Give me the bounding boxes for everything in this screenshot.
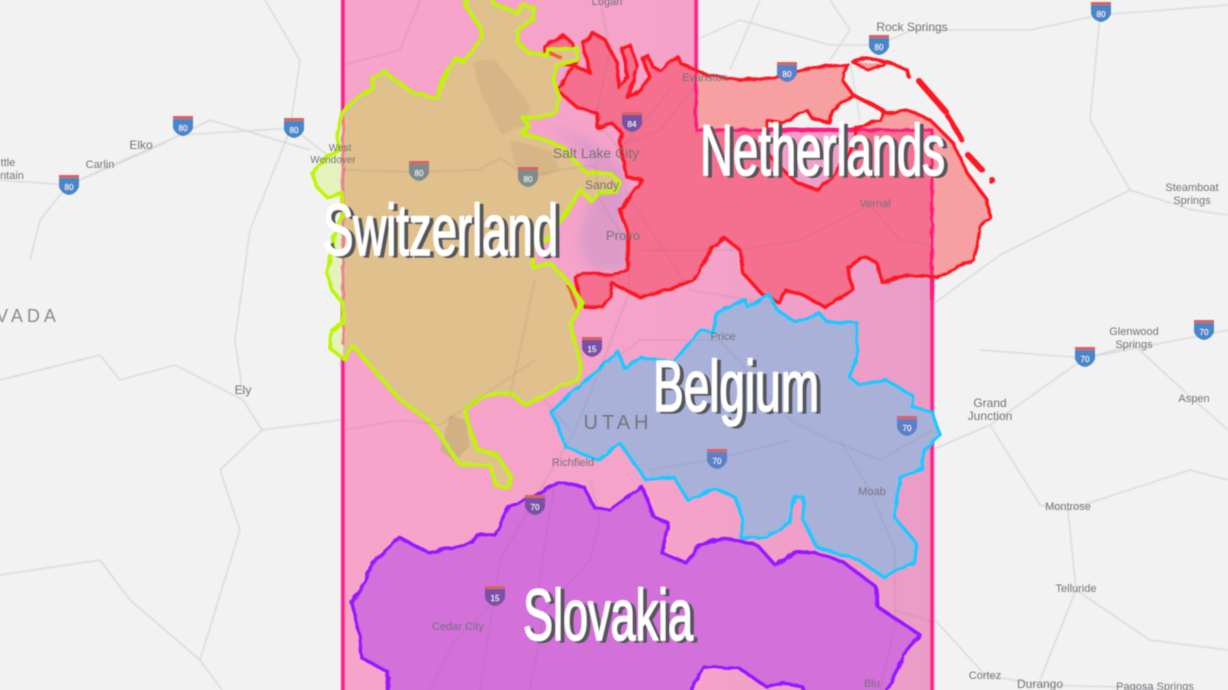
map place labels: Elko xyxy=(129,138,153,152)
label: Switzerland xyxy=(323,191,562,273)
label: Belgium xyxy=(653,347,823,429)
label: Switzerland: Switzerland xyxy=(327,193,562,273)
map place labels: Cedar City xyxy=(432,621,484,633)
highway shields: 15 xyxy=(491,594,500,603)
map place labels: Price xyxy=(710,331,736,343)
highway shields: 70 xyxy=(903,424,912,433)
Utah border under Switzerland xyxy=(342,115,344,345)
label: Netherlands: Netherlands xyxy=(704,113,949,193)
region: Slovakia xyxy=(352,482,920,690)
highway shields: 80 xyxy=(415,169,424,178)
map place labels: Cortez xyxy=(969,670,1001,682)
map place labels: ttle xyxy=(1,157,15,169)
label: Switzerland: Switzerland xyxy=(323,191,558,271)
label: Slovakia: Slovakia xyxy=(523,576,694,656)
map place labels: Ely xyxy=(235,383,251,397)
map place labels: ntain xyxy=(0,170,24,182)
label: Netherlands: Netherlands xyxy=(700,111,945,191)
map place labels: Junction xyxy=(968,409,1012,423)
highway shields: 80 xyxy=(783,70,792,79)
Great Salt Lake shading xyxy=(472,60,560,180)
highway shields: 84 xyxy=(628,120,637,129)
map roads overlay xyxy=(343,0,932,690)
Netherlands north islands xyxy=(853,58,992,181)
label: Slovakia xyxy=(523,576,698,658)
highway shields: 80 xyxy=(65,183,74,192)
map place labels: Springs xyxy=(1173,195,1211,207)
map place labels: Telluride xyxy=(1056,583,1096,595)
map place labels: Springs xyxy=(1115,339,1153,351)
map place labels: Sandy xyxy=(585,178,619,192)
map place labels: Glenwood xyxy=(1109,326,1159,338)
map place labels: Wendover xyxy=(310,155,356,166)
Salt Lake valley shading xyxy=(550,125,628,270)
region: Belgium xyxy=(551,295,940,577)
highway shields: 80 xyxy=(179,124,188,133)
map place labels: Richfield xyxy=(552,457,594,469)
region: Netherlands xyxy=(545,33,992,307)
map place labels: Provo xyxy=(606,228,640,243)
highway shields: 80 xyxy=(524,175,533,184)
highway shields: 80 xyxy=(290,126,299,135)
map place labels: Montrose xyxy=(1045,501,1091,513)
map place labels: Vernal xyxy=(859,198,891,210)
label: Netherlands xyxy=(700,111,949,193)
map place labels: Salt Lake City xyxy=(553,145,639,161)
label: Slovakia: Slovakia xyxy=(527,578,698,658)
highway shields: 70 xyxy=(1200,328,1209,337)
map place labels: Blu xyxy=(864,678,880,690)
overlap slivers xyxy=(549,53,578,310)
highway shields: 15 xyxy=(588,345,597,354)
map place labels: Rock Springs xyxy=(876,20,948,34)
map place labels: Steamboat xyxy=(1165,182,1219,194)
region: Utah outline xyxy=(343,0,932,690)
highway shields: 80 xyxy=(1097,10,1106,19)
map place labels: West xyxy=(329,143,352,154)
map place labels: UTAH xyxy=(584,412,652,434)
label: Belgium: Belgium xyxy=(653,347,819,427)
Utah border over Netherlands xyxy=(696,70,932,300)
region: Switzerland xyxy=(312,0,620,488)
highway shields: 80 xyxy=(875,43,884,52)
highway shields: 70 xyxy=(531,503,540,512)
map place labels: Grand xyxy=(973,396,1007,410)
map place labels: Carlin xyxy=(86,159,114,171)
highway shields: 70 xyxy=(1081,355,1090,364)
map place labels: Moab xyxy=(858,486,886,498)
map place labels: Evanston xyxy=(682,72,728,84)
label: Belgium: Belgium xyxy=(657,349,823,429)
highway shields: 70 xyxy=(713,457,722,466)
map place labels: Aspen xyxy=(1178,393,1210,405)
